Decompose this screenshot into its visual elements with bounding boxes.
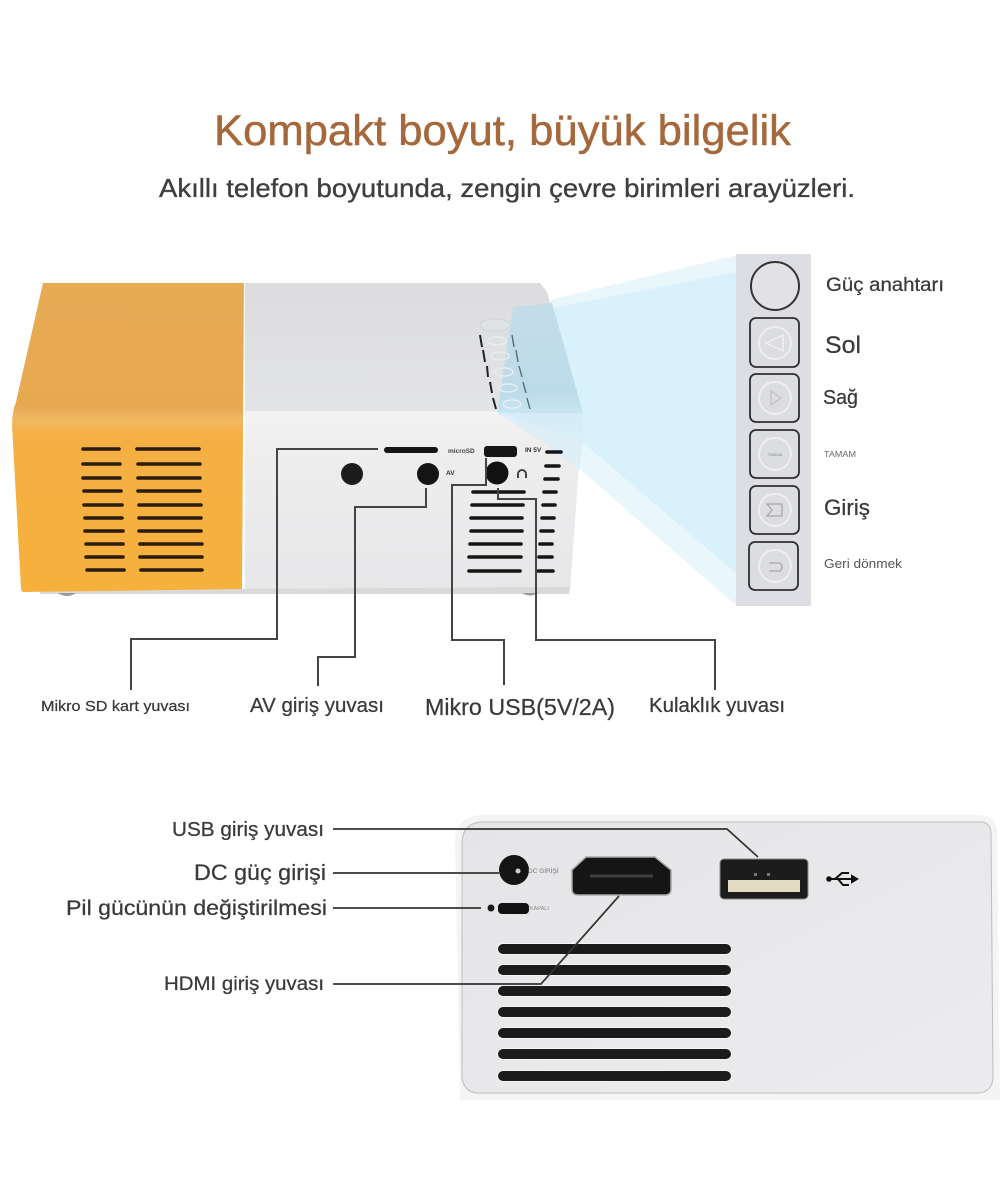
control labels: TAMAM bbox=[824, 450, 856, 459]
control labels: Sağ bbox=[823, 387, 858, 409]
DC jack bbox=[499, 855, 559, 885]
port labels: AV giriş yuvası bbox=[250, 695, 384, 717]
USB port bbox=[720, 859, 808, 899]
power switch bbox=[488, 903, 549, 914]
HDMI port bbox=[572, 857, 671, 895]
icon: headphones bbox=[518, 470, 526, 478]
back button bbox=[749, 542, 798, 590]
projection light beam bbox=[550, 255, 737, 606]
ok button bbox=[750, 430, 799, 478]
port labels: Mikro USB(5V/2A) bbox=[425, 694, 615, 720]
power button bbox=[751, 262, 799, 310]
rear port labels bbox=[66, 819, 327, 995]
control labels: Güç anahtarı bbox=[826, 275, 944, 296]
subtitle: Akıllı telefon boyutunda, zengin çevre birimleri arayüzleri. bbox=[159, 173, 855, 203]
rear vents bbox=[503, 949, 726, 1076]
right button bbox=[750, 374, 799, 422]
control labels bbox=[823, 275, 944, 571]
projector illustration: microSD bbox=[448, 448, 475, 455]
projector illustration: IN 5V bbox=[525, 447, 542, 454]
top control buttons bbox=[480, 319, 530, 409]
port labels bbox=[41, 694, 785, 720]
left button bbox=[750, 318, 799, 367]
rear panel bbox=[455, 815, 1000, 1100]
yellow shell bbox=[12, 283, 244, 592]
rear port labels: HDMI giriş yuvası bbox=[164, 974, 324, 995]
control strip bbox=[736, 254, 811, 606]
bottom edge bbox=[40, 587, 570, 594]
rear port labels: DC güç girişi bbox=[194, 860, 326, 885]
leader lines: rear ports bbox=[333, 829, 758, 984]
control labels: Geri dönmek bbox=[824, 557, 903, 571]
DC jack: DC GİRİŞİ bbox=[528, 866, 559, 875]
leader lines: front ports bbox=[131, 449, 715, 690]
port labels: Mikro SD kart yuvası bbox=[41, 699, 190, 715]
control labels: Sol bbox=[825, 332, 861, 359]
ok button: TAMAM bbox=[768, 452, 782, 457]
side vents bbox=[83, 449, 202, 570]
USB symbol bbox=[827, 873, 857, 885]
input button bbox=[750, 486, 799, 534]
projector illustration: AV bbox=[446, 470, 455, 477]
title: Kompakt boyut, büyük bilgelik bbox=[214, 107, 792, 155]
front ports bbox=[341, 463, 363, 485]
white body front bbox=[245, 411, 583, 590]
blue light tint on body bbox=[497, 303, 583, 440]
power switch: KAPALI bbox=[530, 906, 549, 912]
rear port labels: Pil gücünün değiştirilmesi bbox=[66, 897, 327, 920]
projector illustration bbox=[12, 283, 583, 596]
port labels: Kulaklık yuvası bbox=[649, 695, 785, 717]
white body top bbox=[245, 283, 583, 413]
feet bbox=[58, 593, 538, 596]
front vents bbox=[469, 452, 561, 571]
rear port labels: USB giriş yuvası bbox=[172, 819, 324, 841]
control labels: Giriş bbox=[824, 495, 870, 520]
